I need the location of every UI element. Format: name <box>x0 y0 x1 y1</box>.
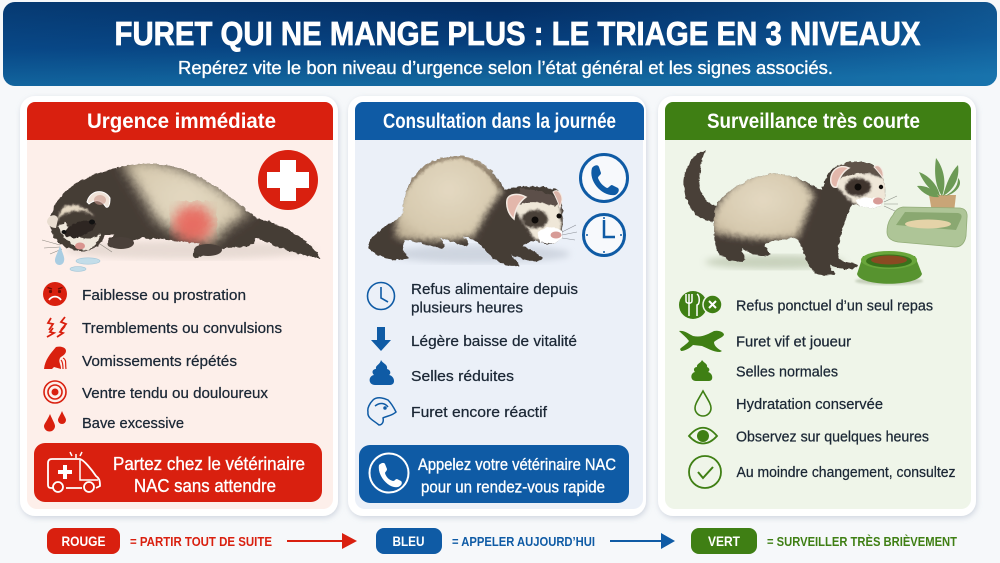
icon: tremors <box>47 317 66 337</box>
text: selles normales: Selles normales <box>736 364 838 381</box>
text: selles réduites: Selles réduites <box>411 368 514 385</box>
icon: vomiting ferret <box>44 347 66 369</box>
icon: drool drops <box>44 411 66 432</box>
text: observez: Observez sur quelques heures <box>736 429 929 446</box>
legend: vert: VERT <box>708 533 740 549</box>
legend: bleu: BLEU <box>392 533 424 549</box>
callout: appelez: pour un rendez-vous rapide <box>421 478 605 496</box>
callout: appelez: Appelez votre vétérinaire NAC <box>418 455 616 474</box>
legend: vert <box>691 528 957 554</box>
callout: partez <box>34 443 322 502</box>
illustration: ferret crouching <box>368 148 577 266</box>
heading bar: consultation: Consultation dans la journée <box>383 110 616 133</box>
text: baisse: Légère baisse de vitalité <box>411 333 577 350</box>
legend: bleu <box>376 528 595 554</box>
callout: partez: Partez chez le vétérinaire <box>113 454 305 474</box>
text: refus ponctuel: Refus ponctuel d’un seul repas <box>736 298 933 315</box>
legend: rouge <box>47 528 272 554</box>
icon: target <box>44 381 66 403</box>
legend: rouge: ROUGE <box>62 533 106 549</box>
icon: red cross <box>258 150 318 210</box>
arrow: red to blue <box>287 533 357 549</box>
heading bar: urgence <box>27 102 333 140</box>
illustration: prostrate ferret <box>42 159 321 271</box>
icon: meal refused <box>679 291 722 319</box>
icon: down arrow <box>371 327 391 351</box>
icon: clock badge <box>584 214 624 256</box>
icon: ferret head <box>368 398 396 425</box>
icon: ambulance <box>48 452 100 492</box>
callout: partez: NAC sans attendre <box>134 476 276 496</box>
icon: eye <box>689 428 717 444</box>
title: FURET QUI NE MANGE PLUS : LE TRIAGE EN 3 NIVEAUX <box>114 15 920 52</box>
text: hydratation: Hydratation conservée <box>736 396 883 413</box>
panel: urgence immédiate <box>20 96 338 516</box>
text: ventre: Ventre tendu ou douloureux <box>82 385 268 402</box>
illustration: food bowl <box>855 251 923 285</box>
heading bar: consultation <box>355 102 644 140</box>
text: furet réactif: Furet encore réactif <box>411 404 548 421</box>
legend: bleu: = APPELER AUJOURD’HUI <box>452 535 595 549</box>
ferret tail <box>684 150 718 222</box>
text: refus alimentaire: Refus alimentaire depuis <box>411 281 578 298</box>
arrow: blue to green <box>610 533 675 549</box>
icon: sad face <box>43 282 67 306</box>
panel: surveillance très courte <box>658 96 976 516</box>
heading bar: urgence: Urgence immédiate <box>87 110 276 133</box>
text: refus alimentaire: plusieurs heures <box>411 300 523 316</box>
icon: check circle <box>689 456 721 488</box>
heading bar: surveillance: Surveillance très courte <box>707 110 920 133</box>
icon: phone badge <box>580 154 628 202</box>
icon: phone <box>370 454 408 492</box>
panel: consultation dans la journée <box>348 96 646 516</box>
legend: vert: = SURVEILLER TRÈS BRIÈVEMENT <box>767 534 957 549</box>
icon: running ferret <box>679 331 724 352</box>
callout: appelez <box>359 445 629 503</box>
subtitle: Repérez vite le bon niveau d’urgence selon l’état général et les signes associés. <box>178 58 833 78</box>
heading bar: surveillance <box>665 102 971 140</box>
text: faiblesse: Faiblesse ou prostration <box>82 287 246 304</box>
text: bave: Bave excessive <box>82 415 184 432</box>
icon: water drop <box>695 391 711 416</box>
text: furet vif: Furet vif et joueur <box>736 334 851 351</box>
illustration: litter tray <box>887 207 967 247</box>
text: au moindre changement: Au moindre changement, consultez <box>736 464 956 481</box>
text: vomissements: Vomissements répétés <box>82 353 237 370</box>
text: refus alimentaire <box>411 281 578 316</box>
text: tremblements: Tremblements ou convulsions <box>82 320 282 337</box>
icon: stool <box>370 360 394 385</box>
title banner <box>3 2 997 86</box>
legend: rouge: = PARTIR TOUT DE SUITE <box>130 535 272 549</box>
icon: normal stool <box>691 360 712 381</box>
illustration: ferret standing <box>684 150 898 275</box>
illustration: plant <box>917 158 960 212</box>
icon: small clock <box>368 282 394 310</box>
